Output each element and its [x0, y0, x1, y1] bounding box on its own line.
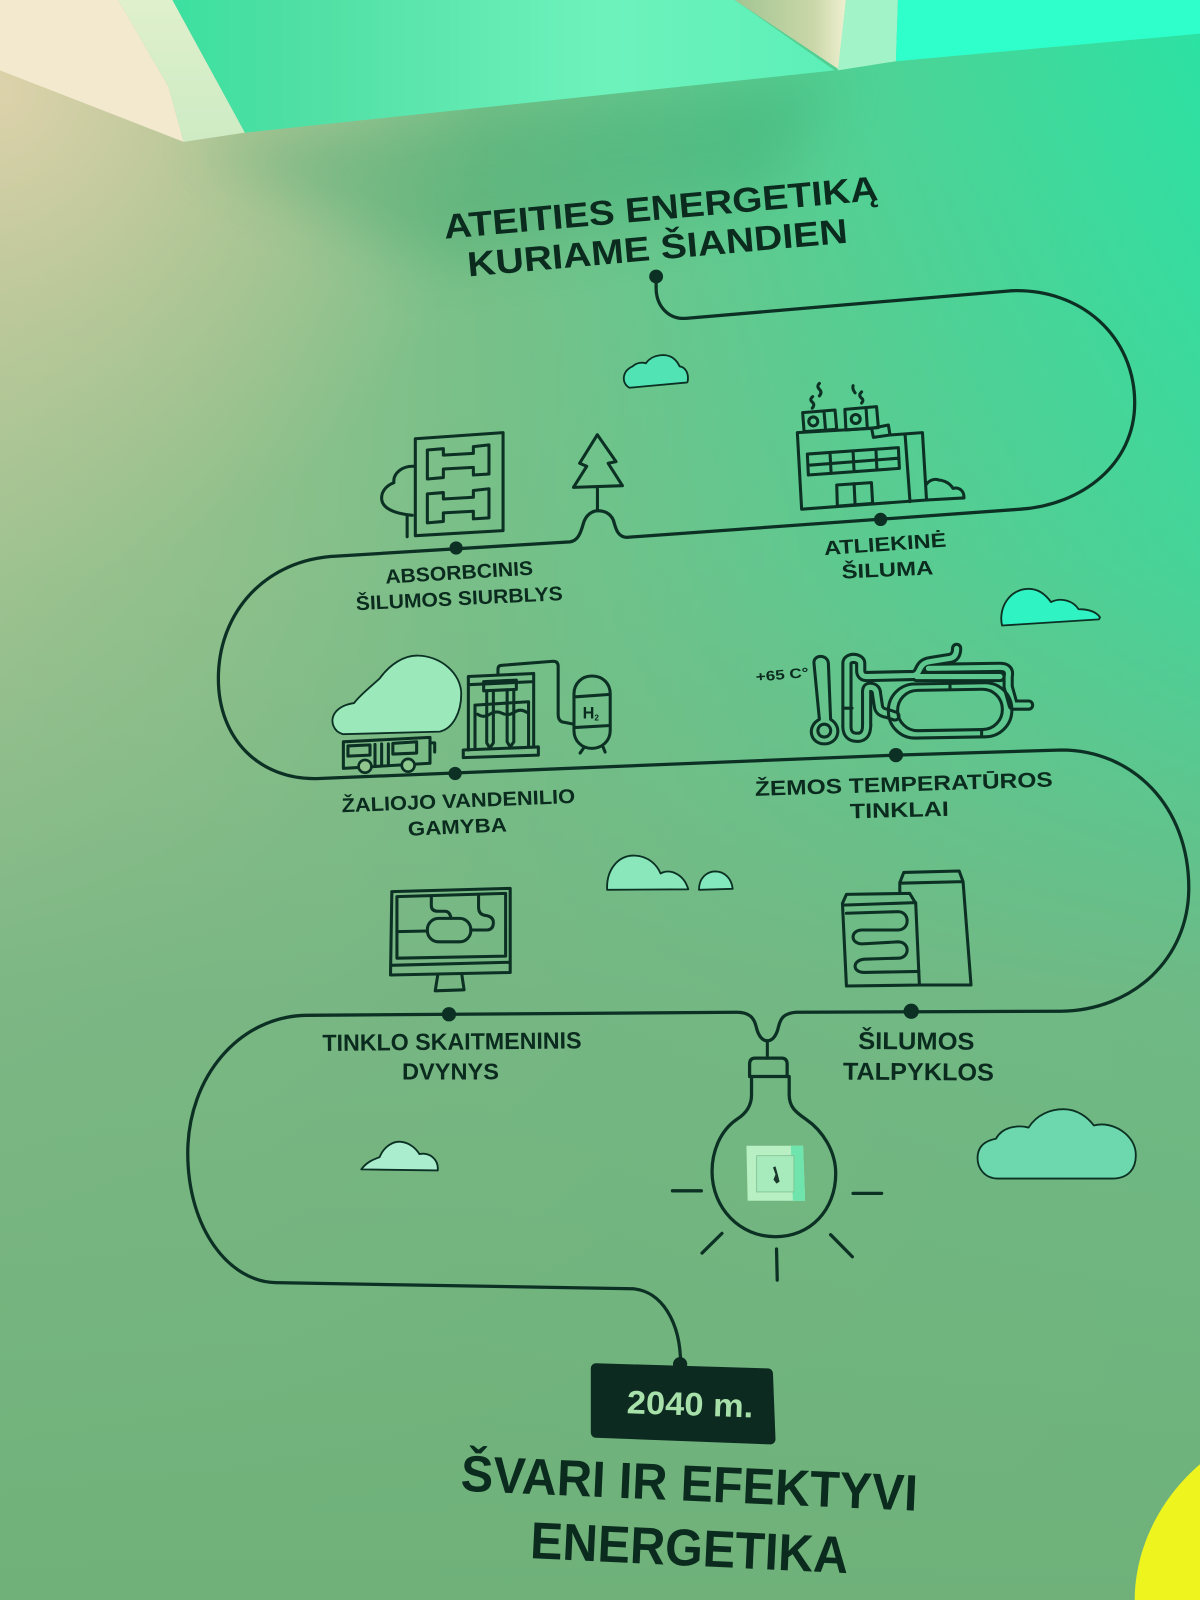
- closing heading: ENERGETIKA: [529, 1512, 850, 1585]
- cloud lower right: [978, 1109, 1136, 1179]
- wall switch: [746, 1146, 805, 1201]
- icon: digital twin monitor: [391, 888, 510, 991]
- label: tinklo skaitmeninis dvynys: TINKLO SKAITMENINIS: [322, 1027, 582, 1056]
- icon: heat storage tanks: [842, 871, 971, 986]
- milestone dot: talpyklos: [904, 1004, 919, 1019]
- timeline path: [188, 270, 1189, 1364]
- milestone dot: vandenilis: [448, 767, 462, 780]
- H2 label: 2: [594, 713, 599, 722]
- icon: electrolyser: [463, 661, 573, 758]
- cloud lower left: [361, 1142, 438, 1170]
- icon: low temperature network pipes: [841, 642, 1034, 743]
- label: zemos temperaturos tinklai: TINKLAI: [850, 798, 949, 823]
- milestone dot: dvynys: [442, 1007, 456, 1021]
- light rays: [672, 1191, 882, 1280]
- label: zemos temperaturos tinklai: ŽEMOS TEMPERATŪROS: [755, 768, 1053, 801]
- icon: light bulb: [672, 1042, 882, 1280]
- year badge: 2040 m.: [626, 1383, 754, 1424]
- label: atliekine siluma: ATLIEKINĖ: [823, 529, 947, 560]
- label: silumos talpyklos: TALPYKLOS: [843, 1059, 994, 1087]
- title: ATEITIES ENERGETIKĄ: [442, 170, 880, 247]
- label: absorbcinis silumos siurblys: ŠILUMOS SIURBLYS: [355, 581, 563, 615]
- icon: thermometer: [811, 656, 838, 744]
- label: atliekine siluma: ŠILUMA: [841, 555, 934, 584]
- cloud centre large: [607, 856, 688, 890]
- title: KURIAME ŠIANDIEN: [466, 211, 849, 284]
- H2 label: H: [583, 704, 594, 722]
- yellow circle corner: [1135, 1464, 1200, 1600]
- icon: bus: [343, 737, 435, 773]
- label: absorbcinis silumos siurblys: [355, 558, 563, 615]
- label: atliekine siluma: [823, 529, 947, 584]
- label: zaliojo vandenilio gamyba: GAMYBA: [407, 814, 507, 841]
- label: silumos talpyklos: ŠILUMOS: [858, 1027, 975, 1056]
- label: absorbcinis silumos siurblys: ABSORBCINIS: [385, 558, 534, 589]
- label: tinklo skaitmeninis dvynys: DVYNYS: [402, 1059, 499, 1085]
- milestone dot: zemos temperaturos: [889, 748, 903, 762]
- closing heading: ŠVARI IR EFEKTYVI: [460, 1444, 919, 1522]
- temperature label: +65 C°: [755, 665, 809, 685]
- icon: hydrogen tank: [574, 676, 610, 753]
- icon: pine tree: [573, 435, 622, 511]
- cloud top centre: [624, 355, 688, 388]
- cloud over bus: [332, 656, 461, 734]
- start dot: [649, 270, 663, 283]
- label: zaliojo vandenilio gamyba: ŽALIOJO VANDENILIO: [341, 784, 576, 817]
- cloud centre small: [699, 871, 733, 890]
- ceiling panels: [0, 0, 1200, 142]
- label: zemos temperaturos tinklai: [755, 768, 1053, 823]
- icon: factory: [797, 383, 964, 509]
- milestone dot: absorbcinis: [449, 541, 463, 555]
- closing heading: [460, 1444, 919, 1585]
- label: zaliojo vandenilio gamyba: [341, 784, 576, 841]
- year badge: [596, 1357, 770, 1439]
- label: tinklo skaitmeninis dvynys: [322, 1027, 582, 1085]
- title: [442, 170, 880, 284]
- label: silumos talpyklos: [843, 1027, 994, 1087]
- milestone dot: atliekine: [874, 513, 887, 526]
- icon: absorption heat pump: [382, 433, 503, 537]
- cloud right: [1001, 589, 1100, 626]
